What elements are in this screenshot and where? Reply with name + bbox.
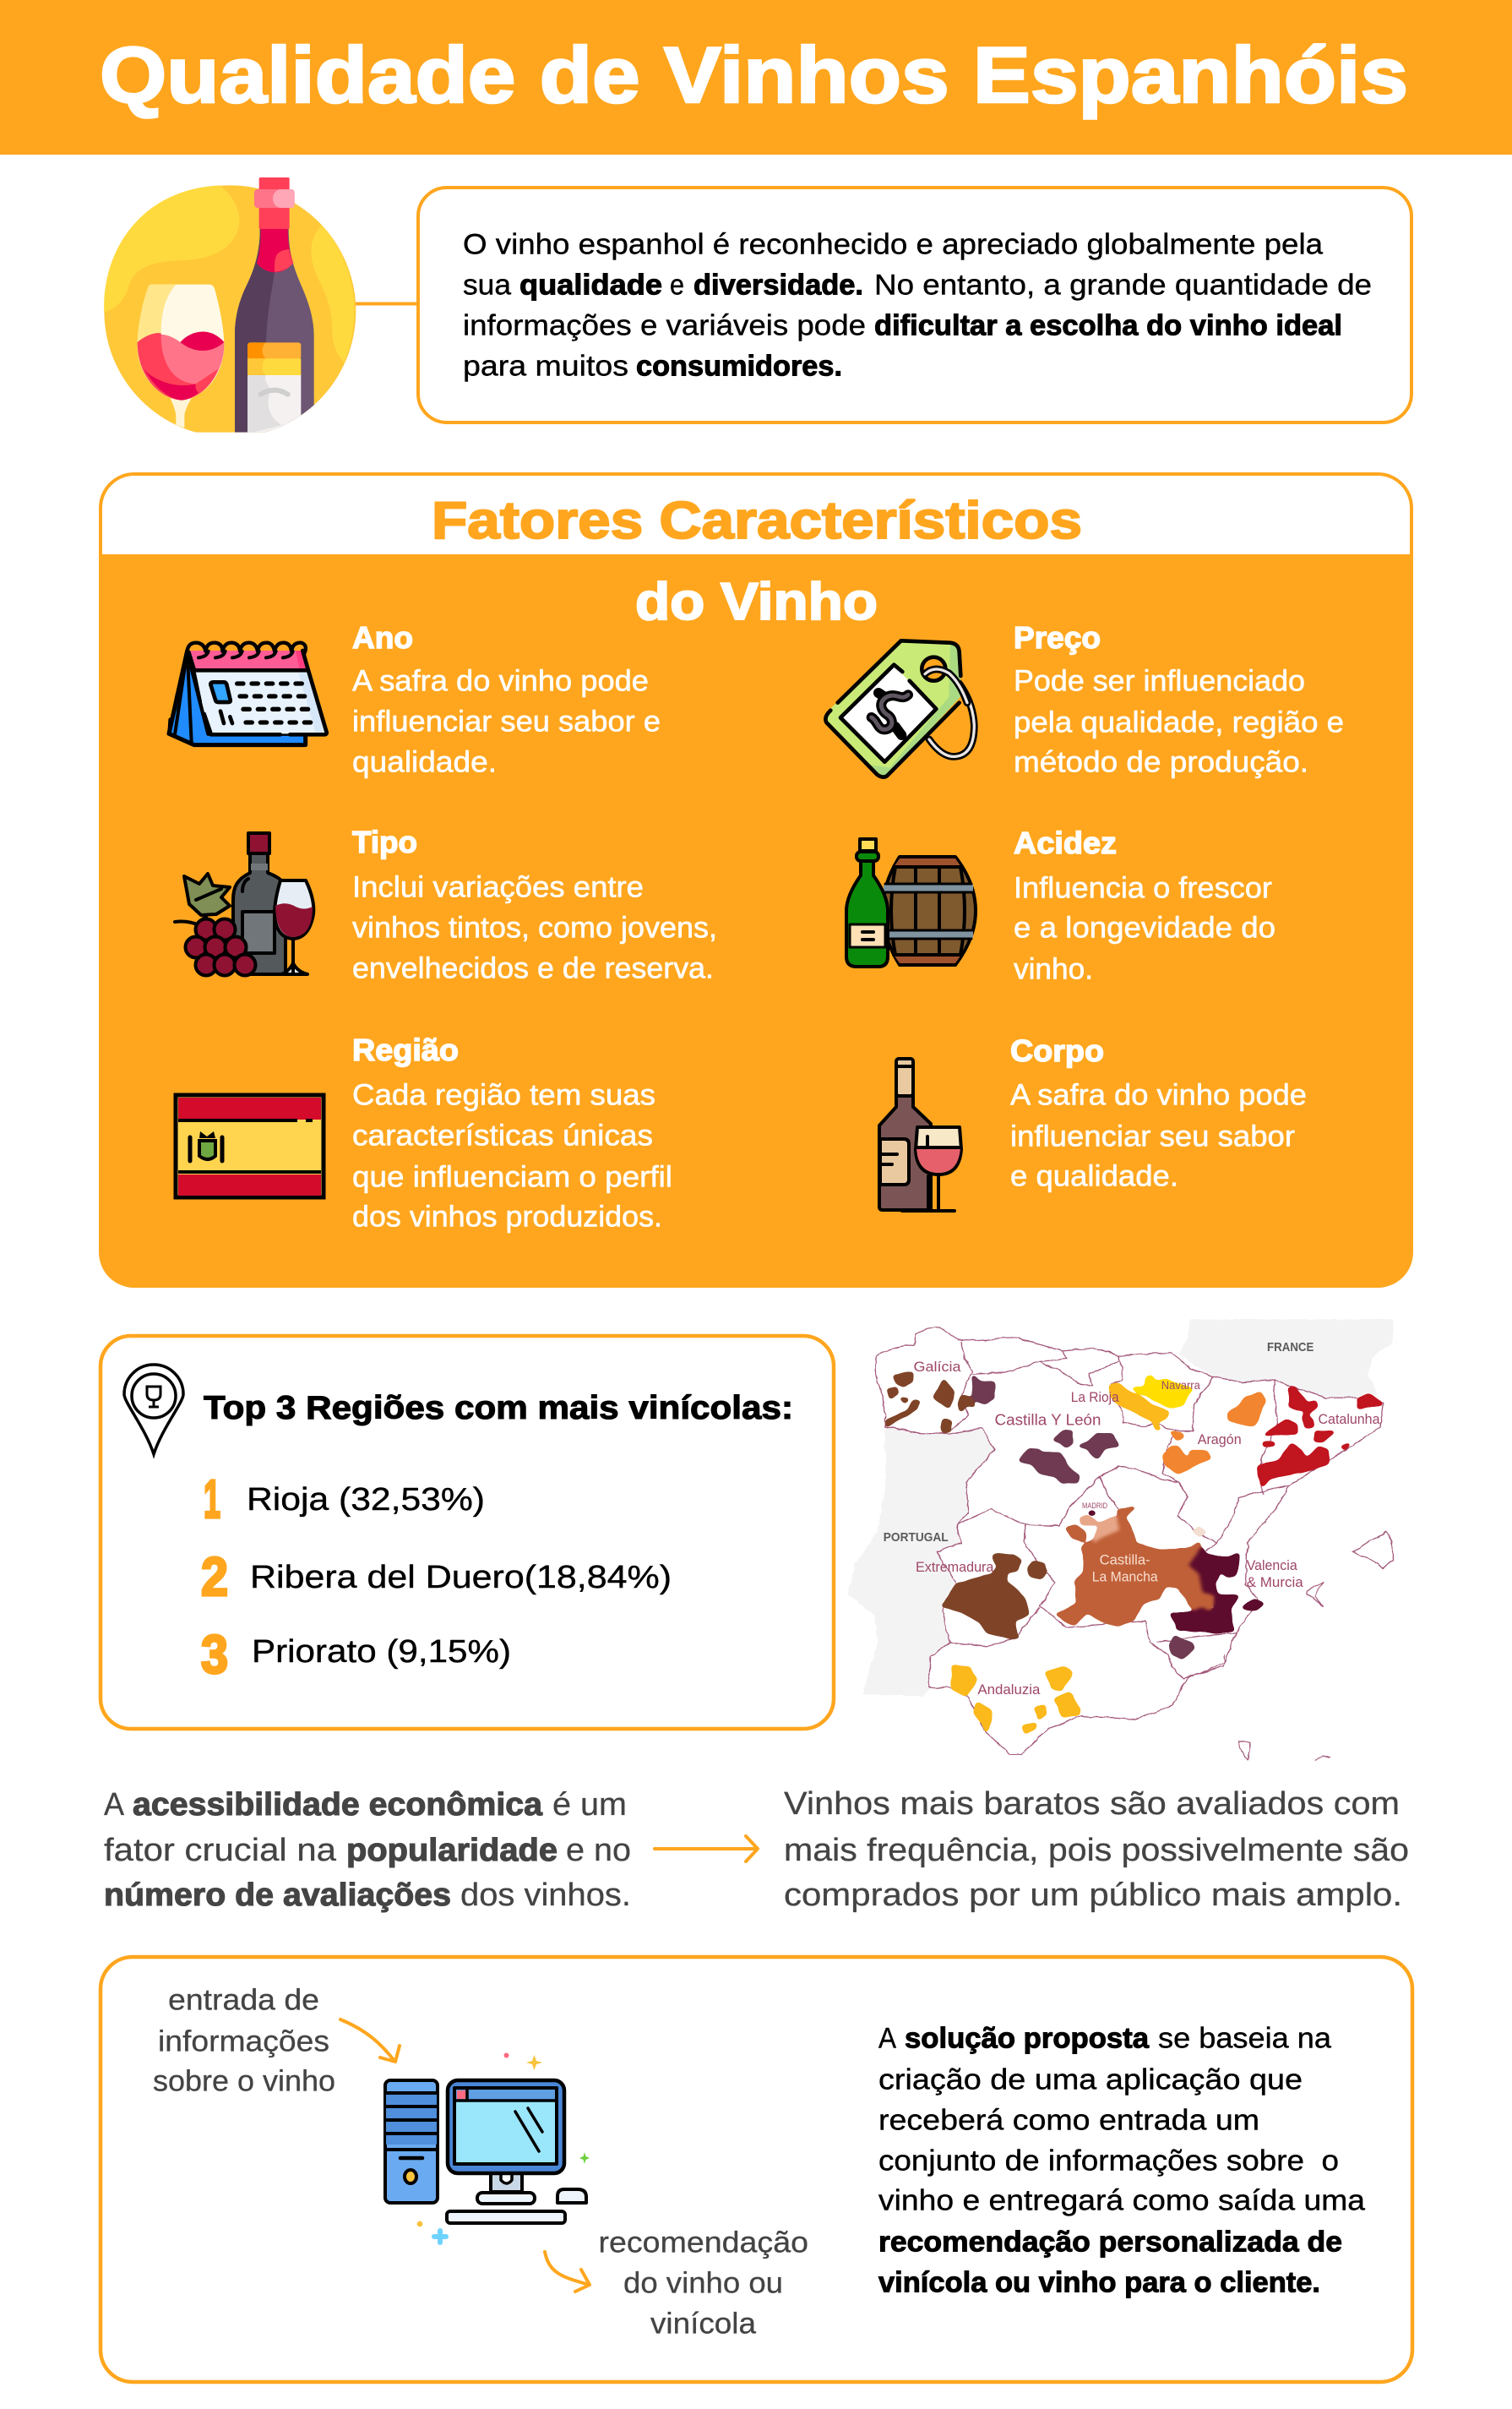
text block: intro: dificultar a escolha do vinho ideal xyxy=(874,309,1342,341)
item: acidez xyxy=(1014,826,1275,985)
item: corpo: A safra do vinho pode xyxy=(1010,1078,1307,1112)
item: região: que influenciam o perfil xyxy=(352,1161,672,1193)
item: região: características únicas xyxy=(352,1119,653,1153)
label: recomendação xyxy=(598,2226,808,2341)
text block: solução proposta: criação de uma aplicação que xyxy=(878,2063,1303,2096)
text block: acessibilidade econômica: dos vinhos. xyxy=(460,1878,631,1913)
arrow: entrada xyxy=(340,2019,400,2062)
item: região: Região xyxy=(352,1033,459,1067)
item: corpo: e qualidade. xyxy=(1010,1159,1178,1193)
item: tipo: envelhecidos e de reserva. xyxy=(352,951,714,985)
list item 2 xyxy=(201,1546,672,1607)
list item 3: 3 xyxy=(201,1624,228,1685)
item: ano: Ano xyxy=(352,620,413,655)
list item 3: Priorato (9,15%) xyxy=(252,1634,511,1670)
text block: solução proposta: receberá como entrada um xyxy=(878,2104,1259,2136)
item: ano: A safra do vinho pode xyxy=(352,664,649,698)
map labels: PORTUGAL xyxy=(884,1530,949,1545)
text block: solução proposta: solução proposta xyxy=(905,2023,1150,2055)
item: ano: qualidade. xyxy=(352,745,497,779)
text block: acessibilidade econômica: número de avaliações xyxy=(104,1878,451,1913)
item: tipo: Inclui variações entre xyxy=(352,870,644,904)
icon: desktop computer xyxy=(385,2053,590,2243)
text block: intro: diversidade. xyxy=(693,269,863,301)
list item 2: Ribera del Duero(18,84%) xyxy=(250,1560,672,1595)
panel: intro text xyxy=(418,188,1411,422)
icon: wine glass and bottle in circle xyxy=(104,177,356,437)
heading: fatores característicos xyxy=(432,492,1082,631)
label: recomendação: recomendação xyxy=(598,2226,808,2259)
panel: solução proposta xyxy=(101,1957,1412,2382)
icon: wine bottle, glass and grapes xyxy=(175,833,313,975)
panel: top 3 regiões xyxy=(101,1336,834,1729)
text block: solução proposta: vinícola ou vinho para o cliente. xyxy=(878,2266,1320,2298)
map labels: Castilla- xyxy=(1100,1551,1150,1568)
title: Qualidade de Vinhos Espanhóis xyxy=(100,30,1408,119)
item: região xyxy=(352,1033,672,1234)
text block: vinhos mais baratos xyxy=(784,1786,1409,1913)
text block: intro: para muitos xyxy=(463,350,628,382)
text block: intro: qualidade xyxy=(519,269,662,301)
map labels: Andaluzia xyxy=(977,1681,1041,1698)
label: entrada de informações: entrada de xyxy=(168,1984,319,2016)
text block: intro xyxy=(463,228,1372,382)
map labels: Aragón xyxy=(1198,1431,1242,1447)
map labels: La Rioja xyxy=(1071,1389,1119,1405)
text block: solução proposta: A xyxy=(878,2023,896,2055)
list item 1: 1 xyxy=(204,1469,220,1529)
arrow: saída xyxy=(545,2252,590,2292)
text block: intro: O vinho espanhol é reconhecido e apreciado globalmente pela xyxy=(463,228,1323,260)
text block: intro: e xyxy=(670,269,684,301)
map labels xyxy=(884,1340,1380,1698)
arrow xyxy=(655,1836,758,1861)
map labels: MADRID xyxy=(1082,1502,1107,1510)
item: corpo: influenciar seu sabor xyxy=(1010,1120,1295,1153)
text block: solução proposta xyxy=(878,2023,1365,2298)
text block: intro: sua xyxy=(463,269,511,301)
map labels: Valencia xyxy=(1247,1557,1297,1573)
header banner xyxy=(0,0,1512,155)
map labels: Navarra xyxy=(1161,1378,1200,1392)
item: corpo xyxy=(1010,1033,1307,1193)
item: preço: Preço xyxy=(1014,620,1101,655)
text block: acessibilidade econômica xyxy=(104,1787,631,1913)
connector line xyxy=(356,302,417,306)
item: ano xyxy=(352,620,661,779)
text block: vinhos mais baratos: Vinhos mais baratos são avaliados com xyxy=(784,1786,1400,1822)
item: região: Cada região tem suas xyxy=(352,1078,655,1112)
text block: intro: No entanto, a grande quantidade de xyxy=(874,269,1372,301)
text block: vinhos mais baratos: mais frequência, pois possivelmente são xyxy=(784,1833,1409,1868)
map labels: & Murcia xyxy=(1247,1574,1303,1590)
item: preço: Pode ser influenciado xyxy=(1014,664,1305,698)
item: região: dos vinhos produzidos. xyxy=(352,1200,662,1234)
text block: solução proposta: conjunto de informações sobre o xyxy=(878,2145,1339,2177)
text block: acessibilidade econômica: é um xyxy=(552,1787,627,1823)
item: ano: influenciar seu sabor e xyxy=(352,705,661,739)
text block: acessibilidade econômica: fator crucial na xyxy=(104,1833,337,1868)
text block: solução proposta: recomendação personalizada de xyxy=(878,2226,1342,2258)
map labels: Catalunha xyxy=(1318,1411,1380,1427)
label: recomendação: do vinho ou xyxy=(623,2266,783,2300)
panel: fatores característicos xyxy=(99,472,1413,1288)
list item 1 xyxy=(204,1469,485,1529)
heading: fatores característicos: do Vinho xyxy=(635,573,878,631)
item: acidez: e a longevidade do xyxy=(1014,911,1275,945)
text block: solução proposta: vinho e entregará como saída uma xyxy=(878,2185,1365,2217)
heading: top 3: Top 3 Regiões com mais vinícolas: xyxy=(204,1390,793,1426)
item: tipo: vinhos tintos, como jovens, xyxy=(352,911,717,945)
label: recomendação: vinícola xyxy=(650,2307,757,2341)
text block: acessibilidade econômica: A xyxy=(104,1787,125,1823)
icon: price tag xyxy=(825,640,974,777)
map labels: La Mancha xyxy=(1092,1568,1158,1585)
text block: vinhos mais baratos: comprados por um público mais amplo. xyxy=(784,1878,1402,1913)
icon: bottle and barrel xyxy=(846,839,976,967)
map labels: Galícia xyxy=(914,1359,961,1375)
icon: bottle and wine glass xyxy=(879,1059,961,1211)
item: acidez: vinho. xyxy=(1014,953,1093,985)
text block: intro: informações e variáveis pode xyxy=(463,309,866,341)
text block: solução proposta: se baseia na xyxy=(1158,2023,1331,2055)
text block: intro: consumidores. xyxy=(636,350,842,382)
label: entrada de informações xyxy=(153,1984,335,2097)
text block: acessibilidade econômica: e no xyxy=(566,1833,631,1868)
item: preço xyxy=(1014,620,1344,779)
item: tipo: Tipo xyxy=(352,825,417,859)
icon: calendar xyxy=(169,643,327,745)
text block: acessibilidade econômica: popularidade xyxy=(346,1833,557,1868)
map of spanish wine regions xyxy=(847,1319,1392,1762)
label: entrada de informações: informações xyxy=(158,2025,329,2058)
item: preço: método de produção. xyxy=(1014,745,1308,779)
heading: fatores característicos: Fatores Característicos xyxy=(432,492,1082,550)
list item 1: Rioja (32,53%) xyxy=(247,1482,485,1518)
item: acidez: Acidez xyxy=(1014,826,1117,860)
text block: acessibilidade econômica: acessibilidade econômica xyxy=(133,1787,543,1823)
map labels: FRANCE xyxy=(1267,1340,1313,1354)
item: corpo: Corpo xyxy=(1010,1033,1104,1068)
item: tipo xyxy=(352,825,717,985)
label: entrada de informações: sobre o vinho xyxy=(153,2065,335,2097)
list item 3 xyxy=(201,1624,511,1685)
list item 2: 2 xyxy=(201,1546,228,1607)
map labels: Extremadura xyxy=(916,1559,994,1575)
map labels: Castilla Y León xyxy=(995,1411,1101,1428)
icon: spanish flag xyxy=(176,1095,324,1197)
item: acidez: Influencia o frescor xyxy=(1014,872,1272,904)
item: preço: pela qualidade, região e xyxy=(1014,706,1344,739)
icon: location pin with glass xyxy=(124,1365,183,1454)
